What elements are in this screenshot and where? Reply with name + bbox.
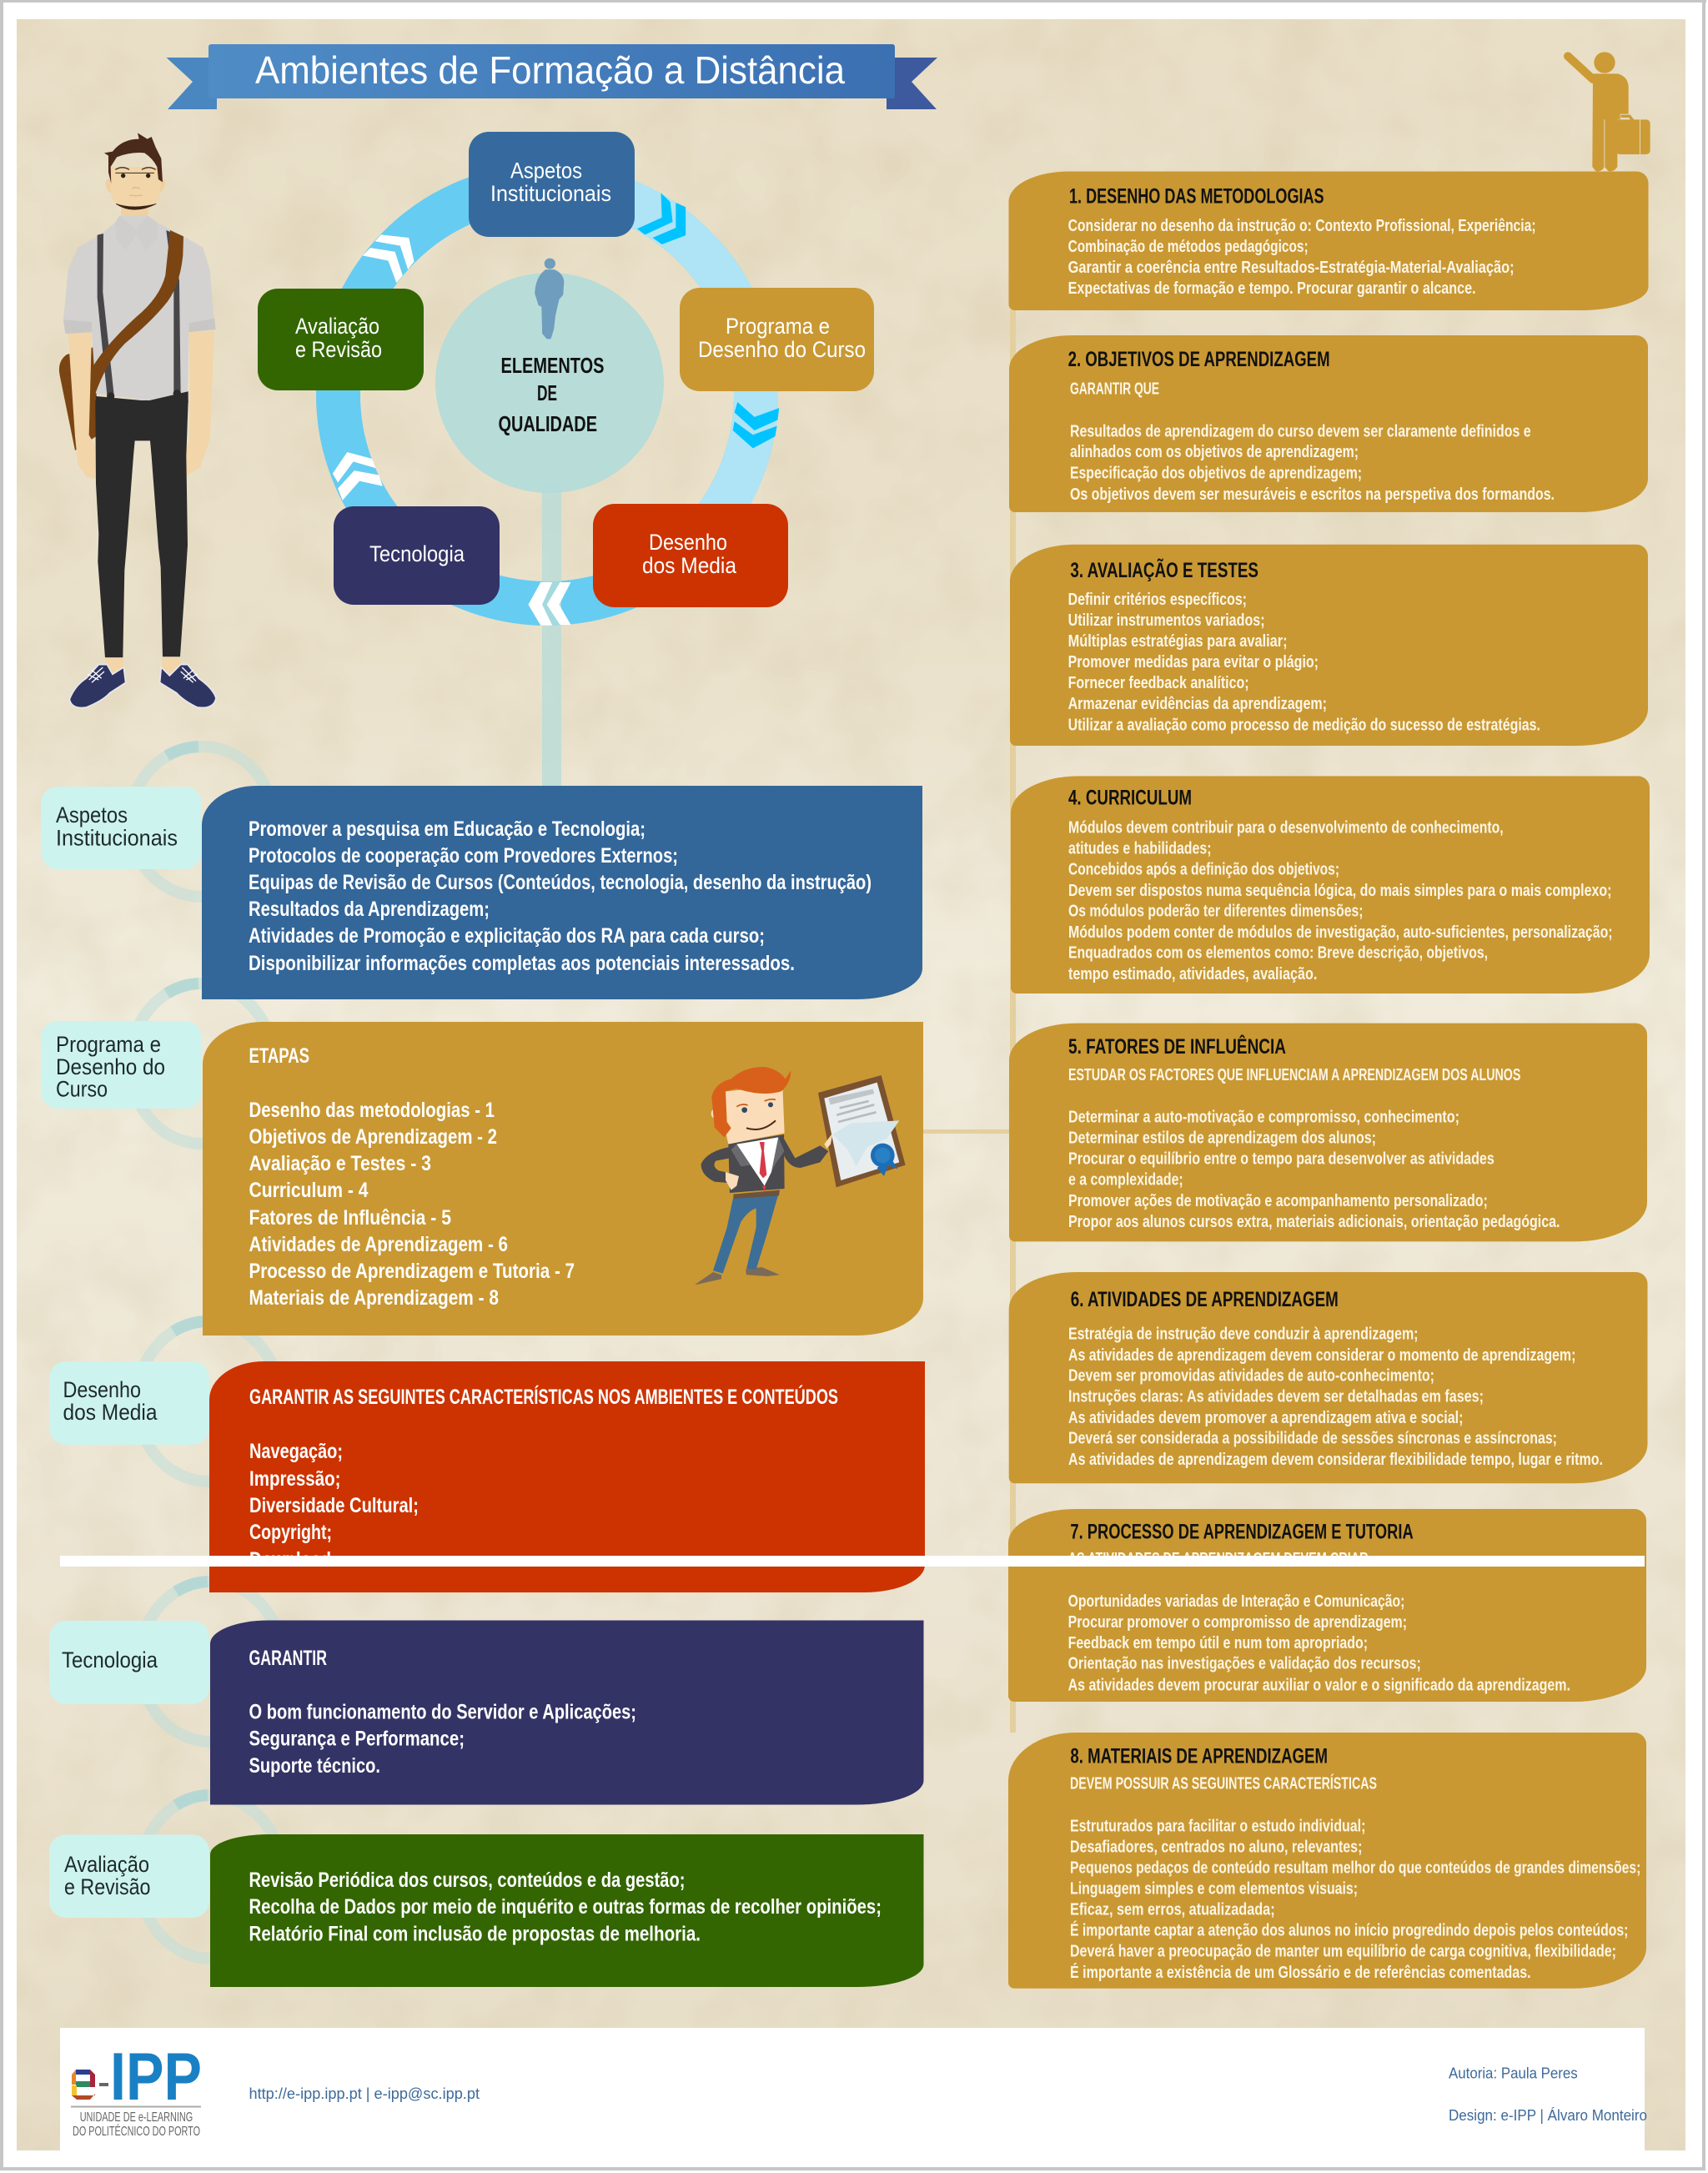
label: aspetos institucionais: Institucionais <box>56 826 178 851</box>
panel: programa e desenho do curso: ETAPAS <box>249 1044 309 1068</box>
node: programa e desenho do curso: Desenho do Curso <box>698 337 866 362</box>
text block 5: Determinar a auto-motivação e compromisso, conhecimento; <box>1068 1108 1459 1126</box>
heading 7: 7. PROCESSO DE APRENDIZAGEM E TUTORIA <box>1070 1521 1414 1544</box>
text block 8: Eficaz, sem erros, atualizadada; <box>1070 1900 1275 1919</box>
center text: elementos de qualidade: ELEMENTOS <box>500 353 604 378</box>
panel: desenho dos media: Copyright; <box>249 1521 332 1544</box>
node: desenho dos media: Desenho <box>649 530 727 555</box>
text block 8: Linguagem simples e com elementos visuais; <box>1070 1880 1358 1899</box>
text block 6: Deverá ser considerada a possibilidade de sessões síncronas e assíncronas; <box>1068 1430 1557 1448</box>
text block 2: Especificação dos objetivos de aprendizagem; <box>1070 464 1362 482</box>
node: aspetos institucionais <box>469 132 635 237</box>
text block 7: Feedback em tempo útil e num tom apropriado; <box>1068 1634 1368 1652</box>
panel: aspetos institucionais: Equipas de Revisão de Cursos (Conteúdos, tecnologia, desenho da instrução) <box>249 871 872 894</box>
text block 4: Os módulos poderão ter diferentes dimensões; <box>1068 903 1363 921</box>
text block 5: Determinar estilos de aprendizagem dos alunos; <box>1068 1129 1376 1148</box>
logo: UNIDADE DE e-LEARNING <box>80 2110 193 2125</box>
label: desenho dos media: Desenho <box>63 1377 141 1402</box>
text block 6 <box>1068 1325 1603 1469</box>
text block 5: ESTUDAR OS FACTORES QUE INFLUENCIAM A APRENDIZAGEM DOS ALUNOS <box>1068 1066 1520 1084</box>
panel: 3 avaliacao e testes <box>1010 545 1648 746</box>
cycle chevrons <box>333 193 779 626</box>
center text: elementos de qualidade: QUALIDADE <box>499 411 597 436</box>
text block 3: Promover medidas para evitar o plágio; <box>1068 653 1319 672</box>
text block 1: Garantir a coerência entre Resultados-Estratégia-Material-Avaliação; <box>1068 259 1515 277</box>
panel: tecnologia: Suporte técnico. <box>249 1754 380 1778</box>
panel: programa e desenho do curso: Objetivos de Aprendizagem - 2 <box>249 1125 497 1149</box>
node: aspetos institucionais: Institucionais <box>490 181 611 206</box>
text block 5: e a complexidade; <box>1068 1171 1183 1190</box>
heading 2: 2. OBJETIVOS DE APRENDIZAGEM <box>1068 348 1330 371</box>
text block 3: Múltiplas estratégias para avaliar; <box>1068 632 1288 651</box>
node: aspetos institucionais: Aspetos <box>510 158 582 184</box>
label: programa e desenho do curso: Curso <box>56 1076 108 1101</box>
panel: aspetos institucionais <box>202 786 922 999</box>
credits: Autoria: Paula Peres <box>1449 2065 1578 2082</box>
text block 3: Armazenar evidências da aprendizagem; <box>1068 695 1327 713</box>
text block 5: Propor aos alunos cursos extra, materiais adicionais, orientação pedagógica. <box>1068 1213 1560 1231</box>
text block 8: É importante a existência de um Glossário e de referências comentadas. <box>1070 1963 1531 1982</box>
panel: 2 objetivos de aprendizagem <box>1009 335 1648 512</box>
heading 6: 6. ATIVIDADES DE APRENDIZAGEM <box>1071 1288 1339 1311</box>
panel: desenho dos media <box>209 1361 925 1592</box>
text block 3: Utilizar a avaliação como processo de medição do sucesso de estratégias. <box>1068 716 1540 734</box>
panel: programa e desenho do curso: Curriculum - 4 <box>249 1179 369 1202</box>
text block 7: As atividades devem procurar auxiliar o valor e o significado da aprendizagem. <box>1068 1676 1570 1694</box>
panel: aspetos institucionais: Atividades de Promoção e explicitação dos RA para cada curso; <box>249 924 765 948</box>
text block 4: Concebidos após a definição dos objetivos; <box>1068 861 1339 879</box>
text block 2: Resultados de aprendizagem do curso devem ser claramente definidos e <box>1070 422 1531 440</box>
text block 7: AS ATIVIDADES DE APRENDIZAGEM DEVEM CRIAR <box>1068 1550 1369 1568</box>
title: Ambientes de Formação a Distância <box>255 48 845 92</box>
panel: avaliacao e revisao: Recolha de Dados por meio de inquérito e outras formas de recolher opiniões; <box>249 1895 882 1919</box>
panel: programa e desenho do curso: Atividades de Aprendizagem - 6 <box>249 1233 508 1256</box>
text block 3: Definir critérios específicos; <box>1068 591 1247 609</box>
panel: 4 curriculum <box>1011 776 1650 993</box>
text block 4 <box>1068 819 1613 983</box>
text block 7: Orientação nas investigações e validação dos recursos; <box>1068 1655 1421 1673</box>
label: tecnologia: Tecnologia <box>62 1647 158 1673</box>
text block 5: Promover ações de motivação e acompanhamento personalizado; <box>1068 1192 1488 1210</box>
text block 1: Combinação de métodos pedagógicos; <box>1068 238 1309 256</box>
node: avaliacao e revisao <box>258 289 424 390</box>
text block 4: Módulos devem contribuir para o desenvolvimento de conhecimento, <box>1068 819 1504 838</box>
text block 2 <box>1070 380 1555 504</box>
text block 4: atitudes e habilidades; <box>1068 839 1211 858</box>
panel: aspetos institucionais: Resultados da Aprendizagem; <box>249 898 490 921</box>
node: avaliacao e revisao: Avaliação <box>295 314 379 339</box>
node: programa e desenho do curso <box>680 288 874 391</box>
heading 5: 5. FATORES DE INFLUÊNCIA <box>1068 1034 1286 1059</box>
panel: tecnologia: Segurança e Performance; <box>249 1728 465 1751</box>
panel: desenho dos media: Impressão; <box>249 1467 340 1491</box>
cycle ring <box>339 185 756 604</box>
illustration: student with shoulder bag <box>59 133 216 707</box>
icon: walking person silhouette <box>535 259 564 339</box>
text block 7: Procurar promover o compromisso de aprendizagem; <box>1068 1613 1407 1632</box>
text block 5 <box>1068 1066 1560 1231</box>
heading 8: 8. MATERIAIS DE APRENDIZAGEM <box>1070 1745 1328 1768</box>
text block 7: Oportunidades variadas de Interação e Comunicação; <box>1068 1592 1404 1611</box>
label: programa e desenho do curso: Desenho do <box>56 1054 165 1079</box>
label: aspetos institucionais: Aspetos <box>56 802 128 827</box>
logo: IPP <box>110 2040 202 2115</box>
panel: desenho dos media: Download <box>249 1548 331 1572</box>
panel: 6 atividades de aprendizagem <box>1009 1272 1648 1483</box>
panel: desenho dos media: GARANTIR AS SEGUINTES CARACTERÍSTICAS NOS AMBIENTES E CONTEÚDOS <box>249 1384 838 1409</box>
node: avaliacao e revisao: e Revisão <box>295 337 382 362</box>
text block 6: Devem ser promovidas atividades de auto-conhecimento; <box>1068 1366 1434 1385</box>
text block 8: DEVEM POSSUIR AS SEGUINTES CARACTERÍSTICAS <box>1070 1773 1377 1793</box>
label: tecnologia <box>49 1621 209 1704</box>
label: aspetos institucionais <box>41 787 202 869</box>
node: tecnologia <box>334 506 500 605</box>
text block 6: Instruções claras: As atividades devem ser detalhadas em fases; <box>1068 1388 1484 1406</box>
panel: avaliacao e revisao: Revisão Periódica dos cursos, conteúdos e da gestão; <box>249 1869 686 1892</box>
text block 8: Desafiadores, centrados no aluno, relevantes; <box>1070 1838 1362 1856</box>
panel: programa e desenho do curso: Desenho das metodologias - 1 <box>249 1099 495 1122</box>
footer <box>60 2028 1647 2150</box>
center text: elementos de qualidade: DE <box>537 380 557 405</box>
node: desenho dos media: dos Media <box>642 553 737 578</box>
panel: programa e desenho do curso: Avaliação e Testes - 3 <box>249 1152 431 1175</box>
label: desenho dos media: dos Media <box>63 1400 158 1425</box>
label: avaliacao e revisao: e Revisão <box>64 1874 150 1899</box>
logo <box>71 2040 202 2139</box>
panel: 5 fatores de influencia <box>1009 1024 1647 1241</box>
text block 2: Os objetivos devem ser mesuráveis e escritos na perspetiva dos formandos. <box>1070 485 1555 504</box>
panel: tecnologia: O bom funcionamento do Servidor e Aplicações; <box>249 1700 636 1723</box>
center circle <box>435 273 664 493</box>
panel: tecnologia: GARANTIR <box>249 1647 327 1670</box>
panel: 1 desenho das metodologias <box>1008 172 1648 310</box>
node: tecnologia: Tecnologia <box>369 541 465 566</box>
panel: desenho dos media: Diversidade Cultural; <box>249 1494 419 1517</box>
logo: DO POLITÉCNICO DO PORTO <box>73 2123 200 2139</box>
credits <box>1449 2065 1647 2124</box>
label: avaliacao e revisao <box>49 1835 209 1918</box>
panel: 7 processo de aprendizagem e tutoria <box>1008 1509 1646 1702</box>
text block 1: Expectativas de formação e tempo. Procurar garantir o alcance. <box>1068 279 1476 298</box>
panel: programa e desenho do curso: Fatores de Influência - 5 <box>249 1206 451 1230</box>
heading 3: 3. AVALIAÇÃO E TESTES <box>1070 557 1258 582</box>
title banner <box>167 44 937 109</box>
panel: programa e desenho do curso: Materiais de Aprendizagem - 8 <box>249 1286 499 1310</box>
text block 8 <box>1070 1773 1640 1982</box>
label: programa e desenho do curso: Programa e <box>56 1032 161 1057</box>
text block 3: Fornecer feedback analítico; <box>1068 674 1249 692</box>
panel: 8 materiais de aprendizagem <box>1008 1733 1646 1989</box>
heading 4: 4. CURRICULUM <box>1068 786 1192 809</box>
text block 6: As atividades devem promover a aprendizagem ativa e social; <box>1068 1409 1463 1427</box>
text block 7 <box>1068 1550 1570 1694</box>
text block 5: Procurar o equilíbrio entre o tempo para desenvolver as atividades <box>1068 1149 1494 1168</box>
heading 1: 1. DESENHO DAS METODOLOGIAS <box>1069 184 1324 208</box>
text block 1 <box>1068 217 1536 298</box>
text block 3: Utilizar instrumentos variados; <box>1068 611 1265 630</box>
panel: tecnologia <box>210 1620 924 1805</box>
text block 4: Enquadrados com os elementos como: Breve descrição, objetivos, <box>1068 944 1488 963</box>
node: programa e desenho do curso: Programa e <box>726 314 830 339</box>
panel: avaliacao e revisao <box>210 1834 924 1987</box>
panel: aspetos institucionais: Promover a pesquisa em Educação e Tecnologia; <box>249 817 646 841</box>
panel: aspetos institucionais: Protocolos de cooperação com Provedores Externos; <box>249 844 678 868</box>
text block 3 <box>1068 591 1540 734</box>
text block 1: Considerar no desenho da instrução o: Contexto Profissional, Experiência; <box>1068 217 1536 235</box>
node: desenho dos media <box>593 504 788 607</box>
contact links: http://e-ipp.ipp.pt | e-ipp@sc.ipp.pt <box>249 2085 480 2102</box>
icon: traveller with briefcase <box>1568 52 1650 171</box>
text block 6: Estratégia de instrução deve conduzir à aprendizagem; <box>1068 1325 1418 1343</box>
text block 6: As atividades de aprendizagem devem considerar o momento de aprendizagem; <box>1068 1346 1575 1365</box>
credits: Design: e-IPP | Álvaro Monteiro <box>1449 2107 1647 2124</box>
panel: programa e desenho do curso: Processo de Aprendizagem e Tutoria - 7 <box>249 1260 575 1283</box>
panel: aspetos institucionais: Disponibilizar informações completas aos potenciais interessados. <box>249 952 795 975</box>
label: programa e desenho do curso <box>41 1021 202 1109</box>
label: avaliacao e revisao: Avaliação <box>64 1852 149 1877</box>
center text: elementos de qualidade <box>499 353 604 436</box>
panel: desenho dos media: Navegação; <box>249 1440 343 1463</box>
text block 4: tempo estimado, atividades, avaliação. <box>1068 965 1317 983</box>
label: desenho dos media <box>49 1361 209 1445</box>
illustration: man holding certificate <box>695 1067 906 1285</box>
text block 2: GARANTIR QUE <box>1070 380 1159 399</box>
text block 8: Estruturados para facilitar o estudo individual; <box>1070 1817 1365 1835</box>
text block 2: alinhados com os objetivos de aprendizagem; <box>1070 443 1359 461</box>
panel: programa e desenho do curso <box>203 1022 923 1335</box>
vertical connector <box>542 481 561 786</box>
panel: avaliacao e revisao: Relatório Final com inclusão de propostas de melhoria. <box>249 1923 701 1946</box>
